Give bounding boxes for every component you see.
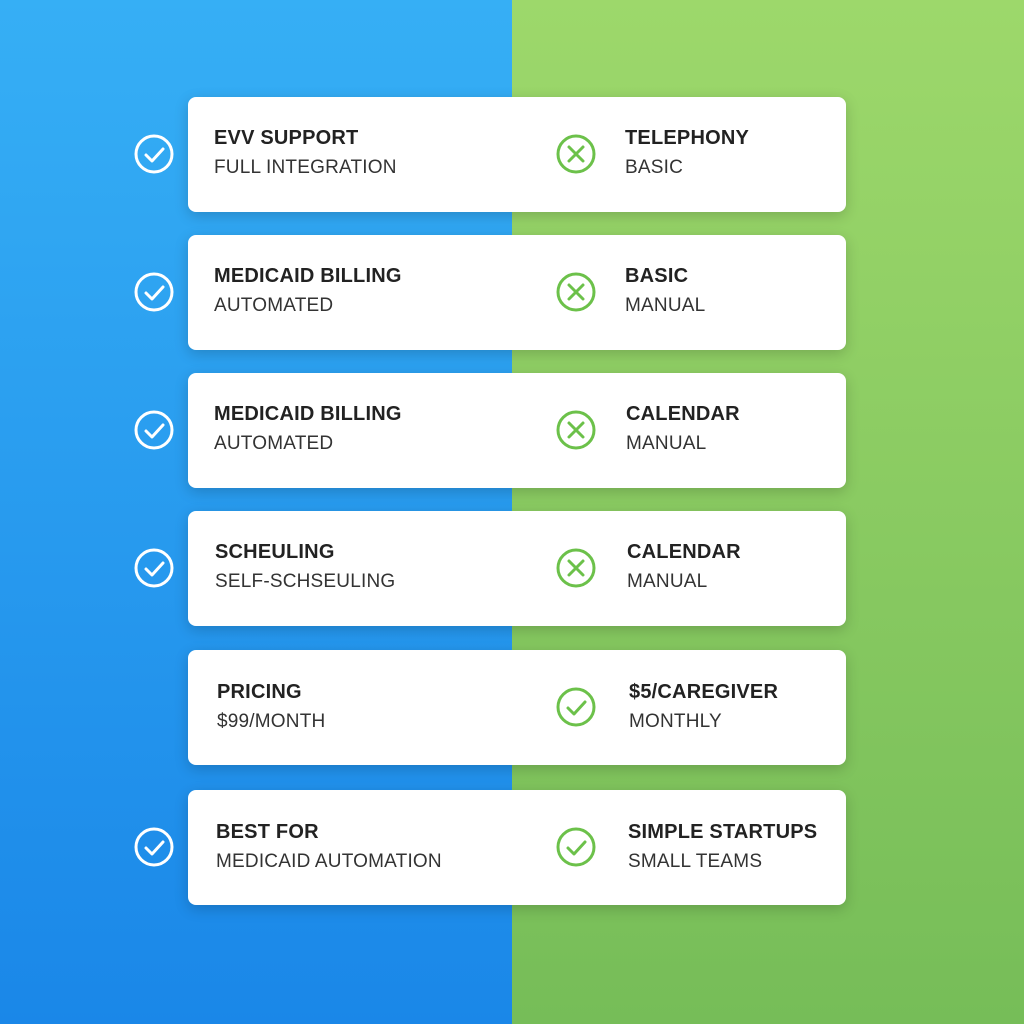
- card: [188, 235, 846, 350]
- card: BASIC: [625, 265, 688, 287]
- card: [188, 511, 846, 626]
- card: AUTOMATED: [214, 433, 333, 454]
- card: AUTOMATED: [214, 295, 333, 316]
- card: BASIC: [625, 157, 683, 178]
- row 2: [134, 233, 852, 360]
- icon: left check: [134, 828, 174, 866]
- icon: left check: [134, 272, 174, 312]
- card: MANUAL: [626, 433, 706, 454]
- row 4: [134, 509, 851, 636]
- card: SELF-SCHSEULING: [215, 571, 395, 592]
- card: MEDICAID BILLING: [214, 403, 402, 425]
- card: MEDICAID BILLING: [214, 265, 402, 287]
- card: MANUAL: [625, 295, 705, 316]
- icon: left check: [134, 134, 174, 174]
- row 1: [134, 95, 852, 222]
- card: [188, 97, 846, 212]
- card: FULL INTEGRATION: [214, 157, 397, 178]
- card: $99/MONTH: [217, 711, 325, 732]
- card: MEDICAID AUTOMATION: [216, 851, 442, 872]
- card: [188, 373, 846, 488]
- card: CALENDAR: [627, 541, 741, 563]
- card: SIMPLE STARTUPS: [628, 821, 817, 843]
- row 5: [182, 648, 851, 775]
- icon: left check: [134, 548, 174, 588]
- card: SMALL TEAMS: [628, 851, 762, 872]
- icon: left check: [134, 410, 174, 450]
- card: TELEPHONY: [625, 127, 749, 149]
- card: $5/CAREGIVER: [629, 681, 778, 703]
- row 3: [134, 371, 852, 498]
- row 6: [134, 788, 851, 915]
- card: [188, 790, 846, 905]
- card: BEST FOR: [216, 821, 319, 843]
- card: CALENDAR: [626, 403, 740, 425]
- card: PRICING: [217, 681, 302, 703]
- card: MONTHLY: [629, 711, 722, 732]
- card: [188, 650, 846, 765]
- card: MANUAL: [627, 571, 707, 592]
- card: SCHEULING: [215, 541, 335, 563]
- card: EVV SUPPORT: [214, 127, 358, 149]
